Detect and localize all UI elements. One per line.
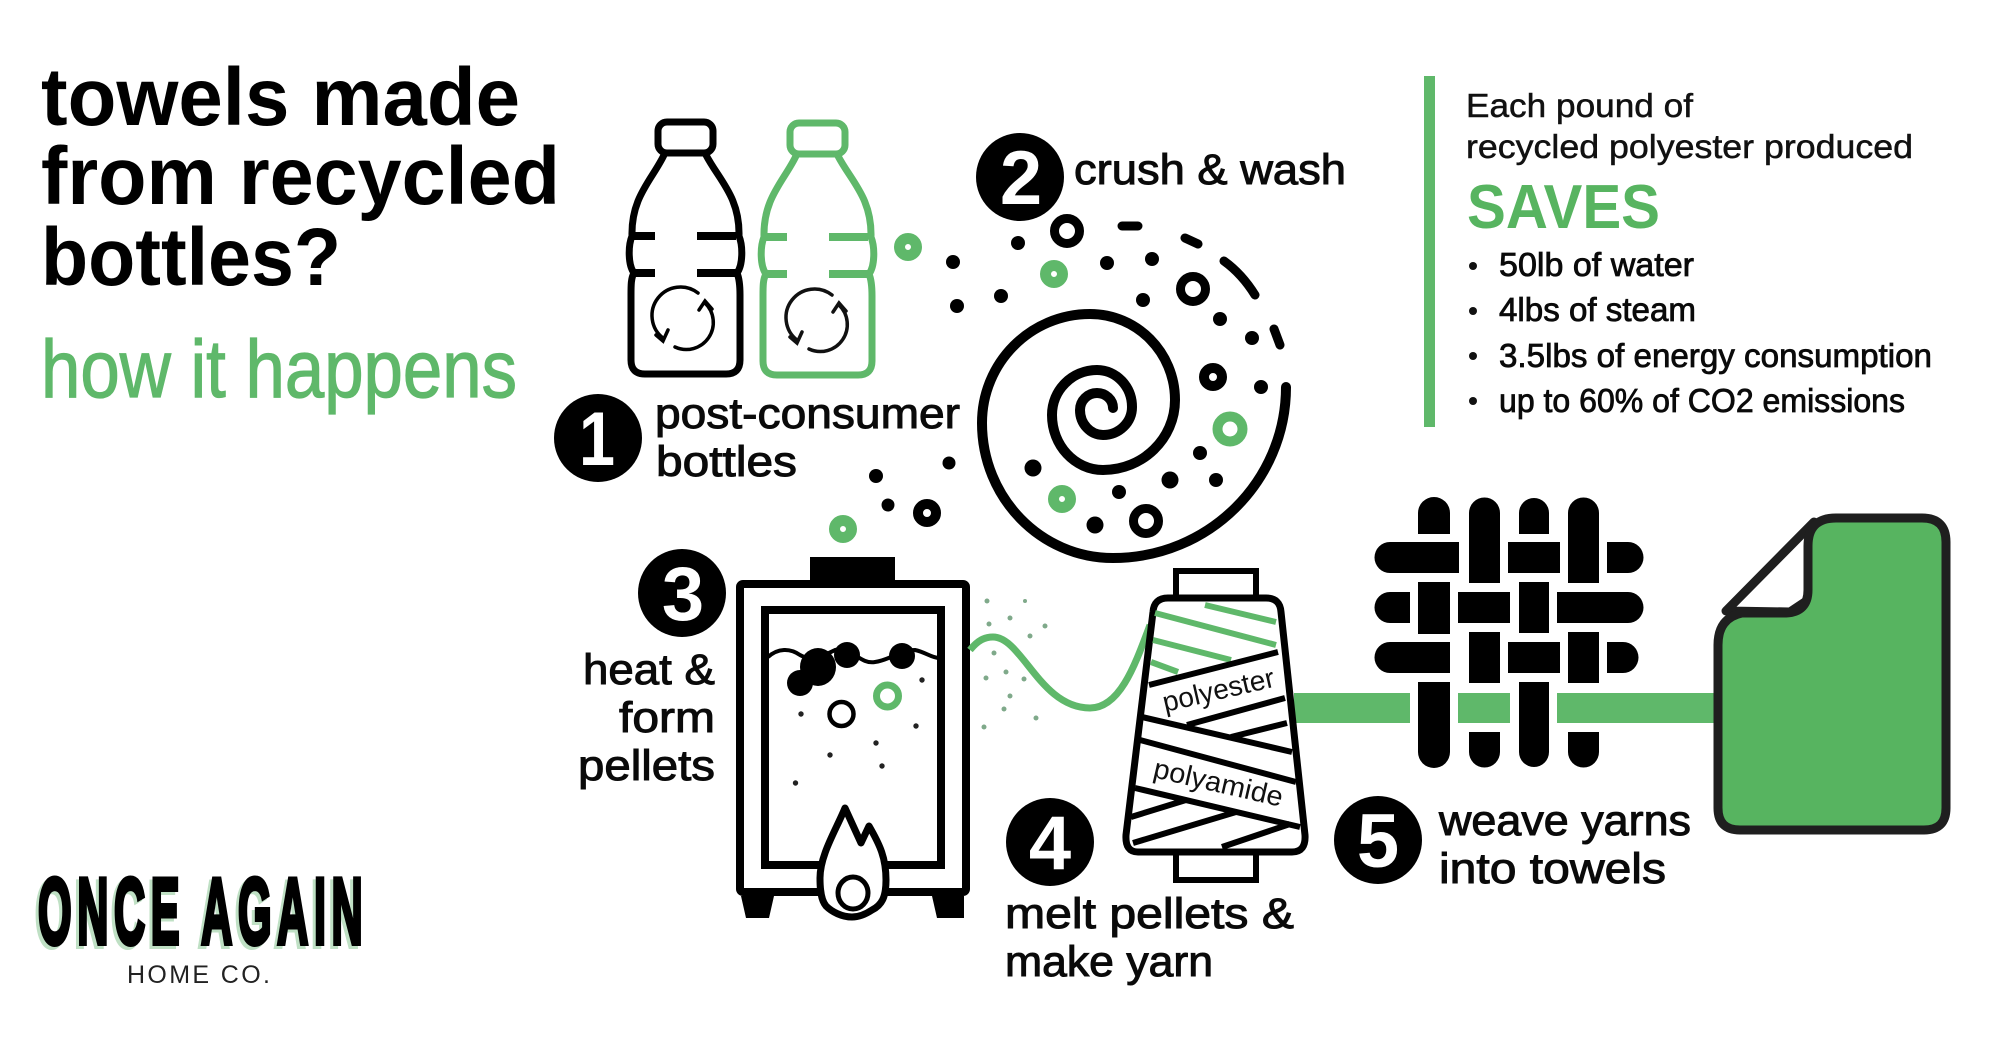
logo: ONCE AGAIN: [35, 862, 360, 967]
icon: black recycled bottle: [629, 122, 742, 374]
spool label: polyamide: polyamide: [1151, 753, 1286, 813]
title: from recycled: [41, 131, 560, 222]
step 3 label: heat &: [583, 646, 715, 694]
step 2 badge: [976, 133, 1064, 221]
subtitle: how it happens: [41, 324, 517, 415]
green accent bar: [1424, 76, 1435, 427]
icon: woven fabric: [1374, 497, 1644, 768]
melting pellets: [787, 642, 915, 696]
title: [41, 52, 560, 303]
pellet rings: [830, 685, 898, 726]
step 2 label: crush & wash: [1074, 146, 1346, 194]
step 1 badge: 1: [579, 397, 615, 482]
spool label: polyester: polyester: [1159, 662, 1277, 718]
SAVES heading: SAVES: [1467, 173, 1660, 242]
icon: crushing spiral: [982, 314, 1286, 558]
step 4 label: make yarn: [1005, 938, 1213, 986]
step 1 badge: [554, 394, 642, 482]
bullet list: up to 60% of CO2 emissions: [1499, 382, 1905, 419]
step 3 badge: 3: [662, 552, 704, 637]
bullet list: 50lb of water: [1499, 246, 1694, 283]
black windings: [1131, 652, 1300, 847]
step 5 label: [1438, 797, 1691, 893]
green yarn segments: [1294, 693, 1715, 723]
step 1 label: bottles: [656, 438, 797, 486]
title: towels made: [41, 52, 520, 143]
bullet list: [1469, 246, 1932, 419]
intro text: recycled polyester produced: [1466, 128, 1913, 165]
step 3 label: form: [619, 694, 715, 742]
step 5 label: into towels: [1439, 845, 1666, 893]
bullet list: 3.5lbs of energy consumption: [1499, 337, 1932, 374]
bullet list: 4lbs of steam: [1499, 291, 1696, 328]
step 5 badge: 5: [1357, 799, 1399, 884]
step 5 label: weave yarns: [1438, 797, 1691, 845]
logo: HOME CO.: [127, 961, 270, 989]
step 1 label: [655, 390, 960, 486]
icon: yarn spool: [1126, 571, 1305, 880]
green windings: [1151, 605, 1276, 672]
icon: finished towel: [1718, 518, 1946, 830]
arrow: green melted yarn: [970, 625, 1150, 708]
step 4 label: melt pellets &: [1005, 890, 1294, 938]
molten surface wave: [768, 649, 939, 662]
step 4 badge: 4: [1029, 801, 1071, 886]
step 1 label: post-consumer: [655, 390, 960, 438]
flakes: green rings: [834, 238, 1242, 538]
intro text: [1466, 87, 1913, 165]
flakes: black particles: [869, 236, 1268, 534]
step 5 badge: [1334, 796, 1422, 884]
icon: furnace: [740, 557, 966, 918]
step 3 label: pellets: [578, 742, 715, 790]
logo: ONCE AGAIN: [38, 859, 363, 964]
step 4 label: [1005, 890, 1294, 986]
step 2 badge: 2: [1000, 136, 1042, 221]
step 3 label: [578, 646, 715, 790]
flakes: black dashes: [1122, 226, 1280, 345]
panel: savings facts: [1424, 76, 1932, 427]
step 3 badge: [638, 549, 726, 637]
step 4 badge: [1006, 798, 1094, 886]
intro text: Each pound of: [1466, 87, 1694, 124]
title: bottles?: [41, 212, 341, 303]
flame: [820, 808, 886, 917]
small particles: [793, 677, 925, 786]
flakes: black rings: [918, 218, 1222, 534]
icon: green recycled bottle: [761, 123, 874, 375]
steam dots: [982, 598, 1048, 730]
